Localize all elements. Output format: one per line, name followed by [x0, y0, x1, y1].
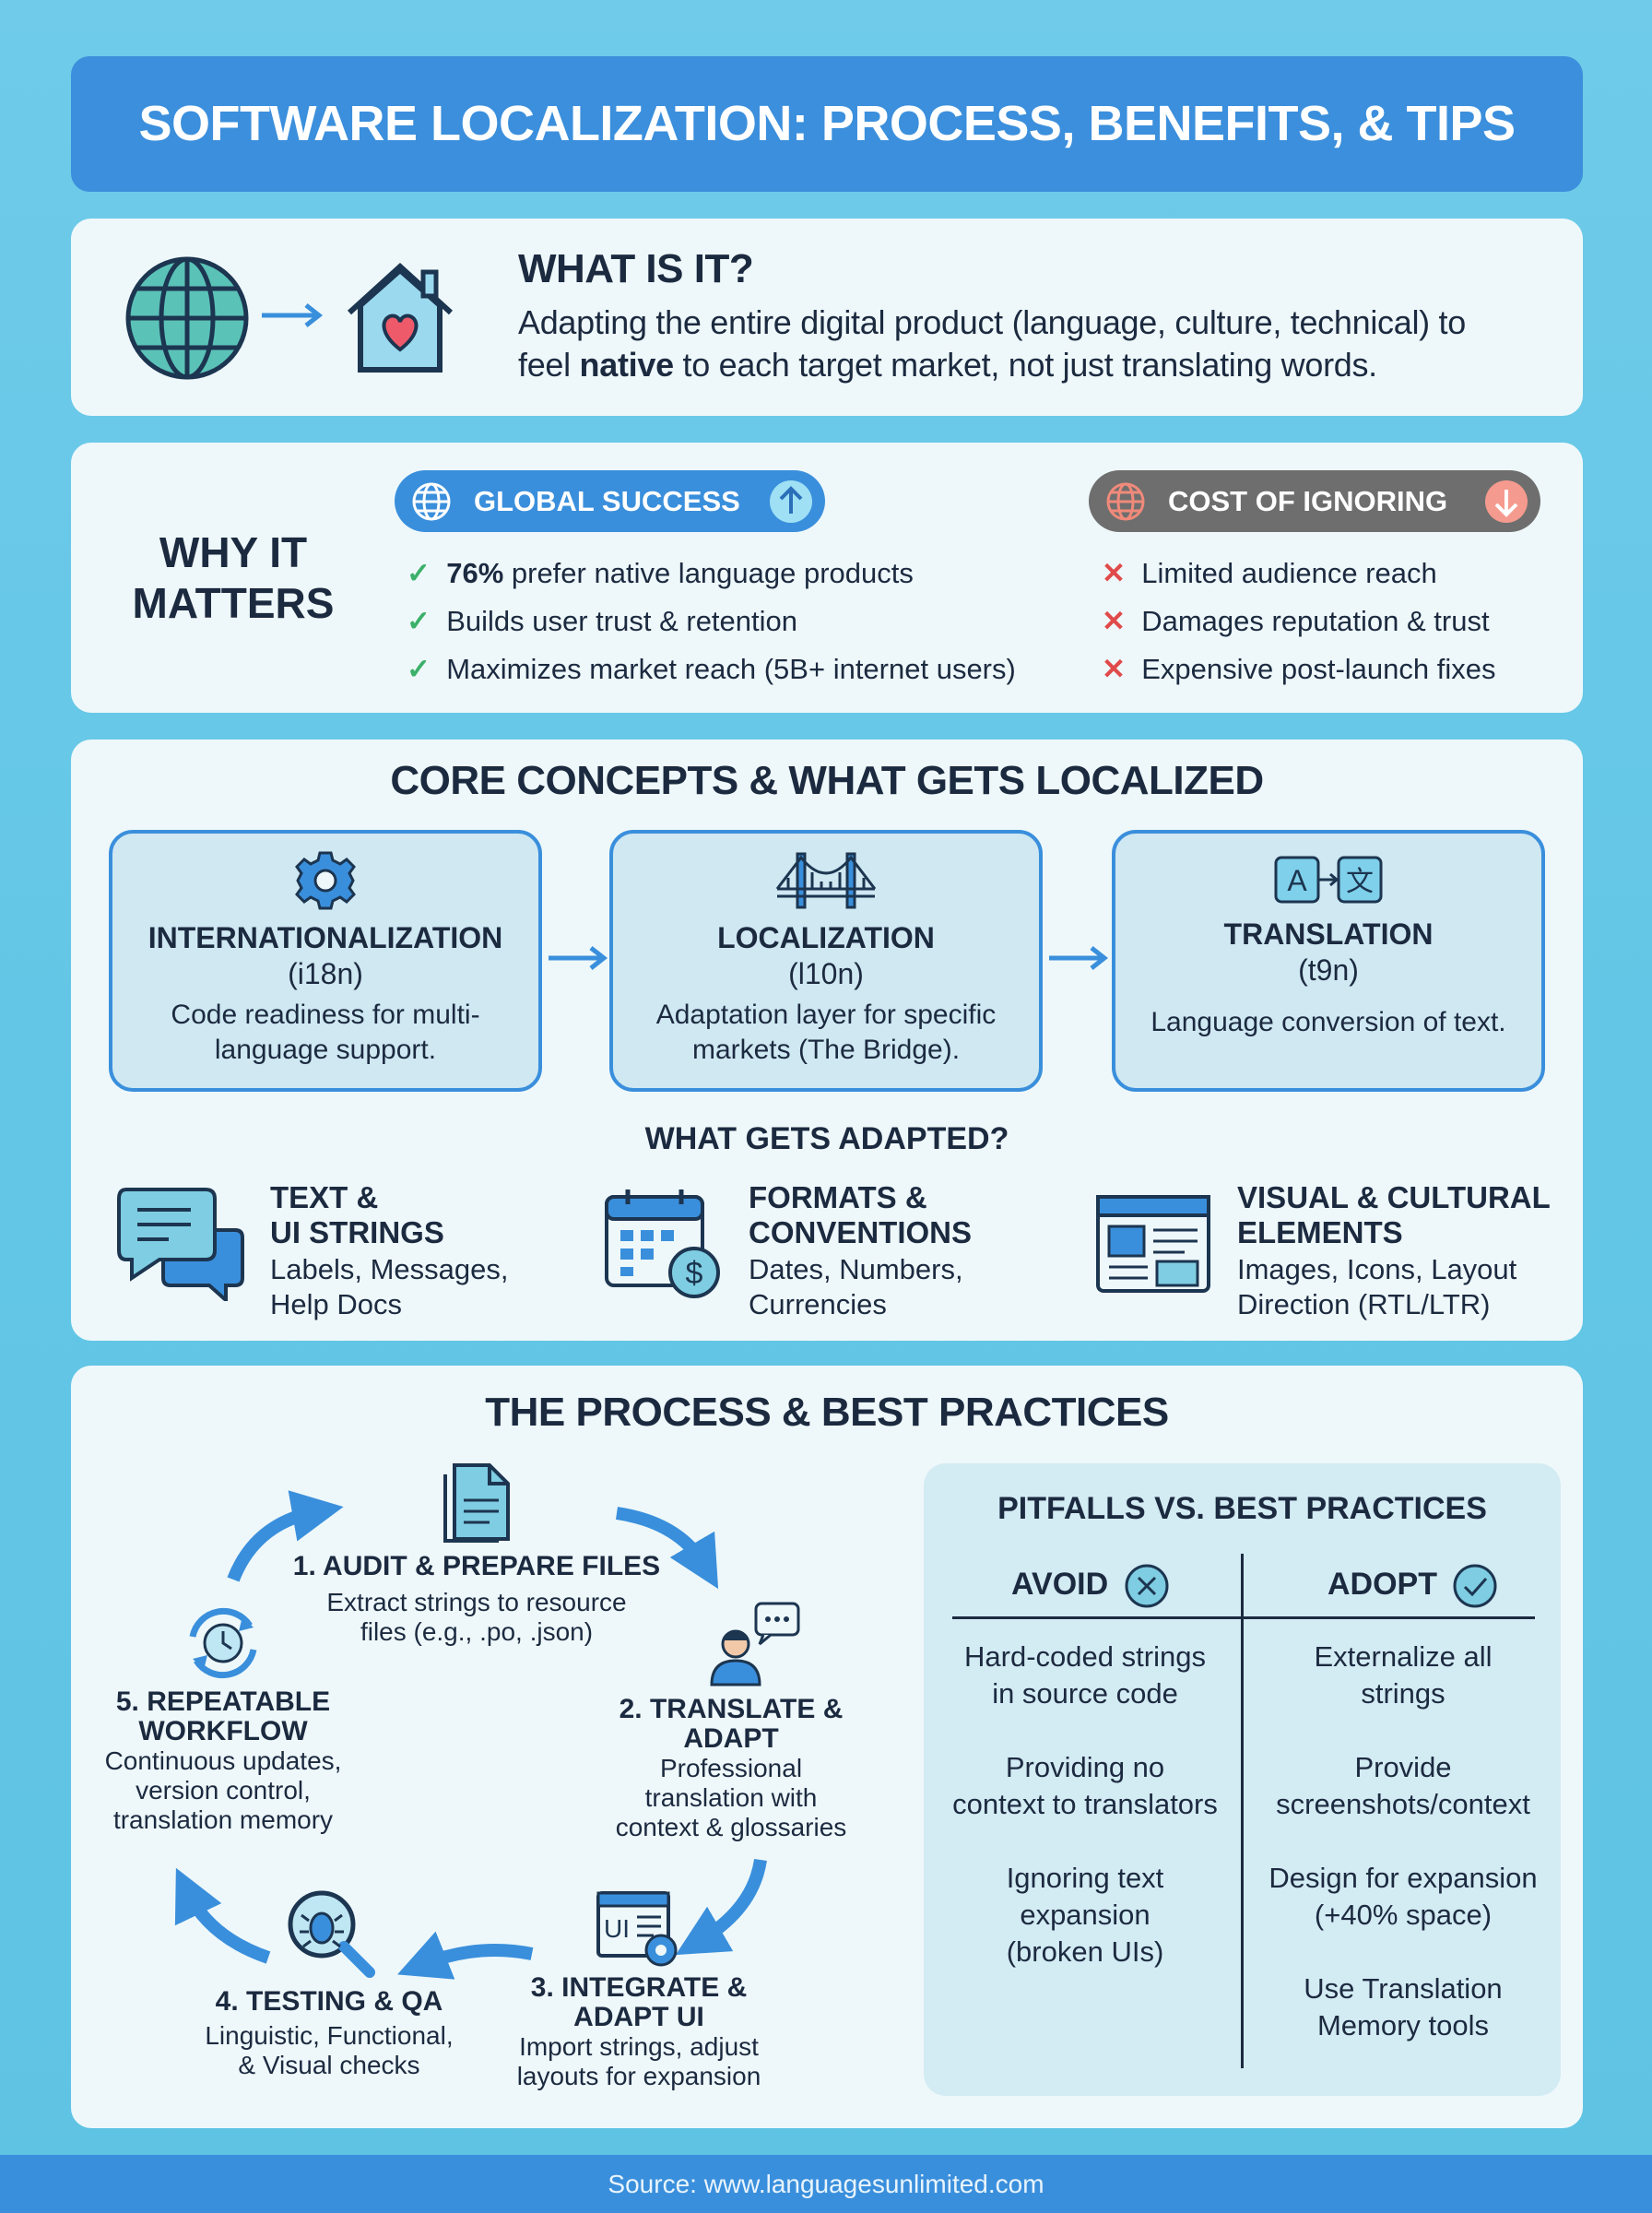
step 5: repeatable workflow [105, 1608, 341, 1834]
heading: what is it: WHAT IS IT? [518, 246, 753, 291]
heading: why it matters: MATTERS [133, 579, 334, 627]
step 3: integrate & adapt ui: ADAPT UI [573, 2002, 704, 2032]
box: internationalization: INTERNATIONALIZATION [148, 921, 502, 954]
pill: global success [395, 470, 825, 532]
icon: calendar with dollar [605, 1189, 720, 1298]
icon: cycle clock [190, 1608, 256, 1678]
step 3: integrate & adapt ui: Import strings, adjust [519, 2032, 759, 2061]
panel: core concepts [71, 740, 1583, 1341]
list: avoid items: Providing no [1006, 1751, 1164, 1783]
list: avoid items: Hard-coded strings [964, 1640, 1206, 1673]
list: adopt items: Memory tools [1317, 2009, 1489, 2041]
list: adopt items: Provide [1354, 1751, 1452, 1783]
item: formats & conventions: FORMATS & [749, 1180, 927, 1214]
icon: globe small [413, 483, 450, 520]
box: translation [1112, 830, 1545, 1092]
list: cost points [1102, 557, 1495, 685]
list: success points: ✓ 76% prefer native language products [407, 557, 914, 589]
box: internationalization [109, 830, 542, 1092]
column header: avoid [1011, 1564, 1169, 1608]
footer: source: Source: www.languagesunlimited.com [608, 2170, 1044, 2198]
step 3: integrate & adapt ui: layouts for expansion [517, 2062, 761, 2090]
box: translation: Language conversion of text. [1150, 1007, 1506, 1037]
step 5: repeatable workflow: version control, [136, 1776, 311, 1805]
icon: globe [125, 256, 249, 380]
item: visual & cultural elements: Images, Icons, Layout [1237, 1253, 1516, 1285]
panel: why it matters [71, 443, 1583, 713]
icon: browser layout [1096, 1195, 1210, 1293]
list: adopt items: Use Translation [1304, 1972, 1503, 2005]
step 5: repeatable workflow: translation memory [113, 1805, 333, 1834]
icon: document [443, 1463, 510, 1543]
icon: globe red [1106, 483, 1145, 520]
title [71, 56, 1583, 192]
step 4: testing & qa [205, 1890, 454, 2079]
step 3: integrate & adapt ui: 3. INTEGRATE & [531, 1972, 747, 2003]
step 5: repeatable workflow: Continuous updates, [105, 1746, 341, 1775]
step 3: integrate & adapt ui [517, 1891, 761, 2090]
list: success points: ✓ Builds user trust & retention [407, 605, 797, 637]
item: visual & cultural elements: ELEMENTS [1237, 1215, 1403, 1249]
panel: process & best practices [71, 1366, 1583, 2128]
column header: avoid: AVOID [1011, 1567, 1108, 1602]
step 1: audit & prepare files [293, 1463, 660, 1646]
list: avoid items: (broken UIs) [1007, 1935, 1163, 1968]
box: translation: TRANSLATION [1224, 917, 1433, 951]
item: text & ui strings: UI STRINGS [270, 1215, 444, 1249]
item: text & ui strings: Labels, Messages, [270, 1253, 508, 1285]
pill: cost of ignoring [1089, 470, 1540, 532]
icon: house with heart [348, 263, 453, 373]
box: localization [609, 830, 1043, 1092]
list: cost points: ✕ Limited audience reach [1102, 557, 1437, 589]
cycle arrows [175, 1490, 767, 1980]
heading: process: THE PROCESS & BEST PRACTICES [485, 1390, 1169, 1435]
step 2: translate & adapt: context & glossaries [616, 1813, 846, 1841]
box: internationalization: Code readiness for multi- [171, 1000, 480, 1030]
step 4: testing & qa: & Visual checks [238, 2051, 420, 2079]
icon: translate: 文 [1346, 858, 1374, 899]
pill: global success: GLOBAL SUCCESS [474, 485, 740, 517]
list: cost points: ✕ Damages reputation & trust [1102, 605, 1490, 637]
footer: source [0, 2155, 1652, 2213]
list: adopt items [1268, 1640, 1538, 2041]
column header: adopt [1328, 1564, 1497, 1608]
arrow: i18n to l10n [549, 946, 608, 970]
item: visual & cultural elements: Direction (RTL/LTR) [1237, 1288, 1490, 1320]
step 4: testing & qa: Linguistic, Functional, [205, 2021, 454, 2050]
item: text & ui strings: Help Docs [270, 1288, 402, 1320]
icon: up arrow [770, 480, 812, 523]
text: definition [518, 303, 1466, 384]
arrow: l10n to t9n [1049, 946, 1108, 970]
heading: why it matters: WHY IT [159, 528, 307, 576]
icon: translate [1274, 856, 1383, 904]
heading: core concepts: CORE CONCEPTS & WHAT GETS LOCALIZED [390, 758, 1264, 803]
icon: bridge [776, 852, 876, 909]
box: translation: (t9n) [1298, 953, 1359, 987]
box: localization: LOCALIZATION [717, 921, 935, 954]
step 1: audit & prepare files: Extract strings to resource [326, 1588, 627, 1616]
icon: magnifier with bug [288, 1890, 375, 1978]
list: adopt items: Externalize all [1315, 1640, 1492, 1673]
icon: translate: A [1287, 864, 1307, 897]
step 2: translate & adapt: 2. TRANSLATE & [620, 1694, 843, 1724]
list: avoid items: Ignoring text [1007, 1862, 1163, 1894]
list: adopt items: screenshots/context [1276, 1788, 1530, 1820]
box: internationalization: (i18n) [288, 957, 363, 990]
heading: what gets adapted: WHAT GETS ADAPTED? [645, 1121, 1009, 1156]
list: avoid items [952, 1640, 1218, 1968]
box: localization: (l10n) [788, 957, 864, 990]
step 2: translate & adapt: translation with [645, 1783, 817, 1812]
step 2: translate & adapt: ADAPT [683, 1723, 779, 1754]
icon: person with speech bubble [710, 1603, 800, 1686]
item: formats & conventions: Dates, Numbers, [749, 1253, 963, 1285]
list: avoid items: expansion [1020, 1899, 1150, 1931]
item: text & ui strings: TEXT & [270, 1180, 378, 1214]
panel: what is it [71, 219, 1583, 416]
box: localization: Adaptation layer for specific [656, 1000, 996, 1030]
box: localization: markets (The Bridge). [692, 1035, 960, 1065]
step 2: translate & adapt [616, 1603, 846, 1841]
title: SOFTWARE LOCALIZATION: PROCESS, BENEFITS, & TIPS [138, 96, 1516, 151]
list: success points [407, 557, 1016, 685]
item: formats & conventions: Currencies [749, 1288, 887, 1320]
icon: UI with gear [596, 1891, 677, 1966]
item: formats & conventions: CONVENTIONS [749, 1215, 972, 1249]
icon: chat bubbles [117, 1188, 244, 1301]
icon: down arrow [1485, 480, 1528, 523]
arrow: globe to house [262, 303, 323, 327]
list: adopt items: (+40% space) [1315, 1899, 1492, 1931]
box: internationalization: language support. [215, 1035, 436, 1065]
text: definition: feel native to each target market, not just translating words. [518, 346, 1377, 384]
text: definition: Adapting the entire digital product (language, culture, technical) to [518, 303, 1466, 341]
list: cost points: ✕ Expensive post-launch fixes [1102, 653, 1495, 685]
box: pitfalls vs best practices [924, 1463, 1561, 2096]
step 5: repeatable workflow: 5. REPEATABLE [116, 1686, 330, 1717]
step 5: repeatable workflow: WORKFLOW [138, 1716, 308, 1746]
item: formats & conventions [605, 1180, 972, 1320]
step 1: audit & prepare files: 1. AUDIT & PREPARE FILES [293, 1551, 660, 1581]
column header: adopt: ADOPT [1328, 1567, 1437, 1602]
list: success points: ✓ Maximizes market reach (5B+ internet users) [407, 653, 1016, 685]
step 4: testing & qa: 4. TESTING & QA [216, 1986, 442, 2017]
item: visual & cultural elements [1096, 1180, 1551, 1320]
step 1: audit & prepare files: files (e.g., .po, .json) [360, 1617, 593, 1646]
pill: cost of ignoring: COST OF IGNORING [1168, 485, 1447, 517]
icon: gear [295, 852, 356, 909]
item: visual & cultural elements: VISUAL & CULTURAL [1237, 1180, 1551, 1214]
list: adopt items: Design for expansion [1268, 1862, 1538, 1894]
list: avoid items: context to translators [952, 1788, 1218, 1820]
list: avoid items: in source code [992, 1677, 1178, 1710]
heading: pitfalls vs best practices: PITFALLS VS. BEST PRACTICES [997, 1491, 1487, 1526]
list: adopt items: strings [1361, 1677, 1446, 1710]
icon: UI with gear: UI [604, 1914, 630, 1943]
heading: why it matters [133, 528, 334, 627]
item: text & ui strings [117, 1180, 508, 1320]
icon: calendar with dollar: $ [686, 1256, 703, 1291]
step 2: translate & adapt: Professional [660, 1754, 802, 1782]
